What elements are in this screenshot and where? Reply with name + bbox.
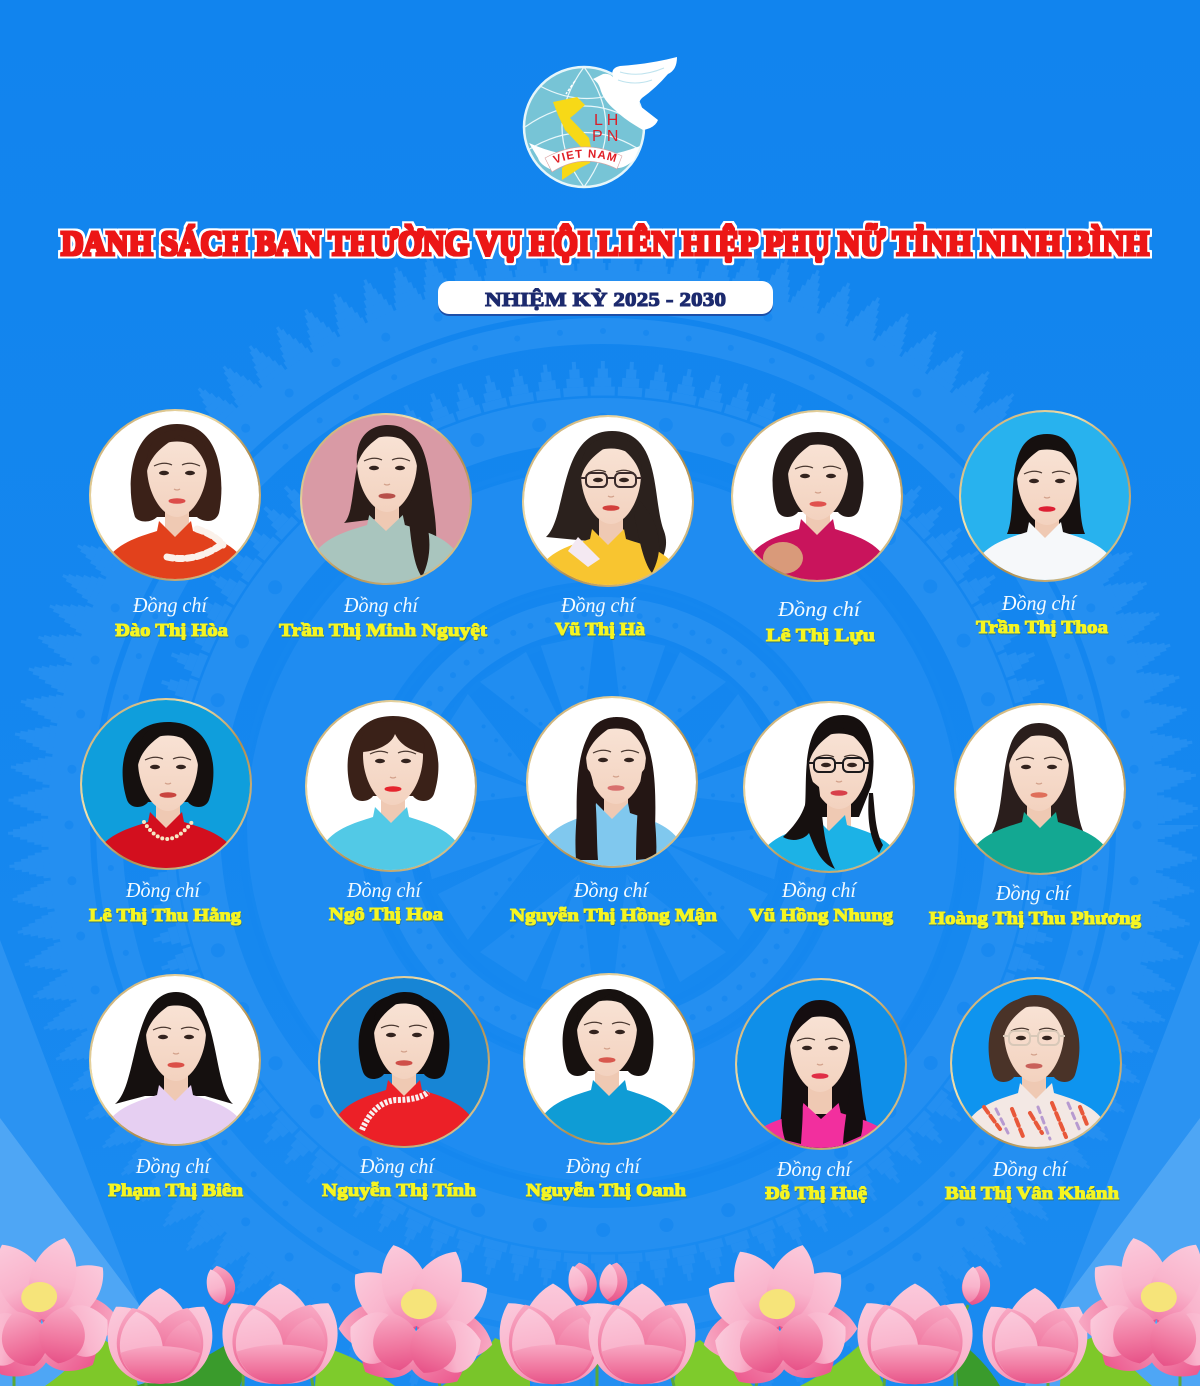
caption [108,1154,243,1200]
lotus buds [201,1260,994,1308]
caption: Vũ Thị Hà [555,619,645,639]
caption: Phạm Thị Biên [108,1180,243,1200]
portrait [526,696,698,879]
caption: Trần Thị Minh Nguyệt [279,620,487,640]
member: Lê Thị Thu Hằng [80,698,252,925]
caption [749,878,893,925]
caption: Đồng chí [776,1157,853,1181]
member: Đào Thị Hòa [89,409,261,640]
term pill [438,281,773,316]
portrait [523,973,695,1156]
caption: Đồng chí [125,878,202,902]
caption: Đồng chí [573,878,650,902]
member: Phạm Thị Biên [89,974,261,1200]
caption: Đồng chí [781,878,858,902]
portrait [522,415,694,605]
caption [976,591,1108,637]
caption: Đồng chí [777,597,862,621]
caption: Nguyễn Thị Oanh [526,1180,686,1200]
caption [765,1157,867,1203]
caption: Lê Thị Lựu [766,625,875,645]
caption: Lê Thị Thu Hằng [89,905,241,925]
caption [89,878,241,925]
portrait [89,974,261,1161]
caption: Hoàng Thị Thu Phương [929,908,1141,928]
member: Vũ Hồng Nhung [743,701,915,925]
caption: Nguyễn Thị Tính [322,1180,476,1200]
caption: Đồng chí [995,881,1072,905]
caption [279,593,487,640]
member: Nguyễn Thị Hồng Mận [510,696,717,925]
caption [510,878,717,925]
portrait [731,410,903,595]
caption [115,593,228,640]
caption [766,597,875,645]
logo: Women's Union emblem: P N [592,128,618,145]
caption [555,593,645,639]
member: Trần Thị Thoa [959,410,1131,637]
caption: Đồng chí [346,878,423,902]
portrait [80,698,252,888]
caption: Đồng chí [135,1154,212,1178]
caption [322,1154,476,1200]
caption: Đồng chí [992,1157,1069,1181]
portrait [954,703,1126,888]
portrait [743,701,915,891]
caption: Bùi Thị Vân Khánh [945,1183,1119,1203]
member: Ngô Thị Hoa [305,700,477,924]
member: Bùi Thị Vân Khánh [945,977,1122,1203]
logo: Women's Union emblem: L H [594,112,618,129]
member: Nguyễn Thị Oanh [523,973,695,1200]
logo: Women's Union emblem: VIET NAM [552,150,617,163]
lotus leaves [45,1335,1152,1386]
portrait [300,413,472,591]
logo: Women's Union emblem [522,57,677,188]
portrait [318,976,490,1156]
caption [526,1154,686,1200]
caption: Đồng chí [359,1154,436,1178]
caption: Đỗ Thị Huệ [765,1183,867,1203]
caption: Đồng chí [343,593,420,617]
portrait [305,700,477,883]
caption: Ngô Thị Hoa [329,904,443,924]
member: Trần Thị Minh Nguyệt [279,413,487,640]
caption [945,1157,1119,1203]
member: Nguyễn Thị Tính [318,976,490,1200]
caption [929,881,1141,928]
caption [329,878,443,924]
lotus border [0,1225,1200,1386]
caption: Đồng chí [565,1154,642,1178]
caption: Đồng chí [132,593,209,617]
member: Đỗ Thị Huệ [735,978,907,1203]
member: Lê Thị Lựu [731,410,903,645]
caption: Đồng chí [560,593,637,617]
portrait [735,978,907,1150]
lotus flowers [0,1225,1200,1386]
member: Hoàng Thị Thu Phương [929,703,1141,928]
caption: Trần Thị Thoa [976,617,1108,637]
portrait [89,409,261,597]
portrait [950,977,1122,1159]
light wedge right [1025,940,1200,1386]
caption: Nguyễn Thị Hồng Mận [510,905,717,925]
caption: Đào Thị Hòa [115,620,228,640]
term pill: NHIỆM KỲ 2025 - 2030 [485,288,726,311]
light wedge left [0,940,175,1386]
caption: Vũ Hồng Nhung [749,905,893,925]
caption: Đồng chí [1001,591,1078,615]
lotus stems [14,1305,1180,1386]
portrait [959,410,1131,598]
member: Vũ Thị Hà [522,415,694,639]
